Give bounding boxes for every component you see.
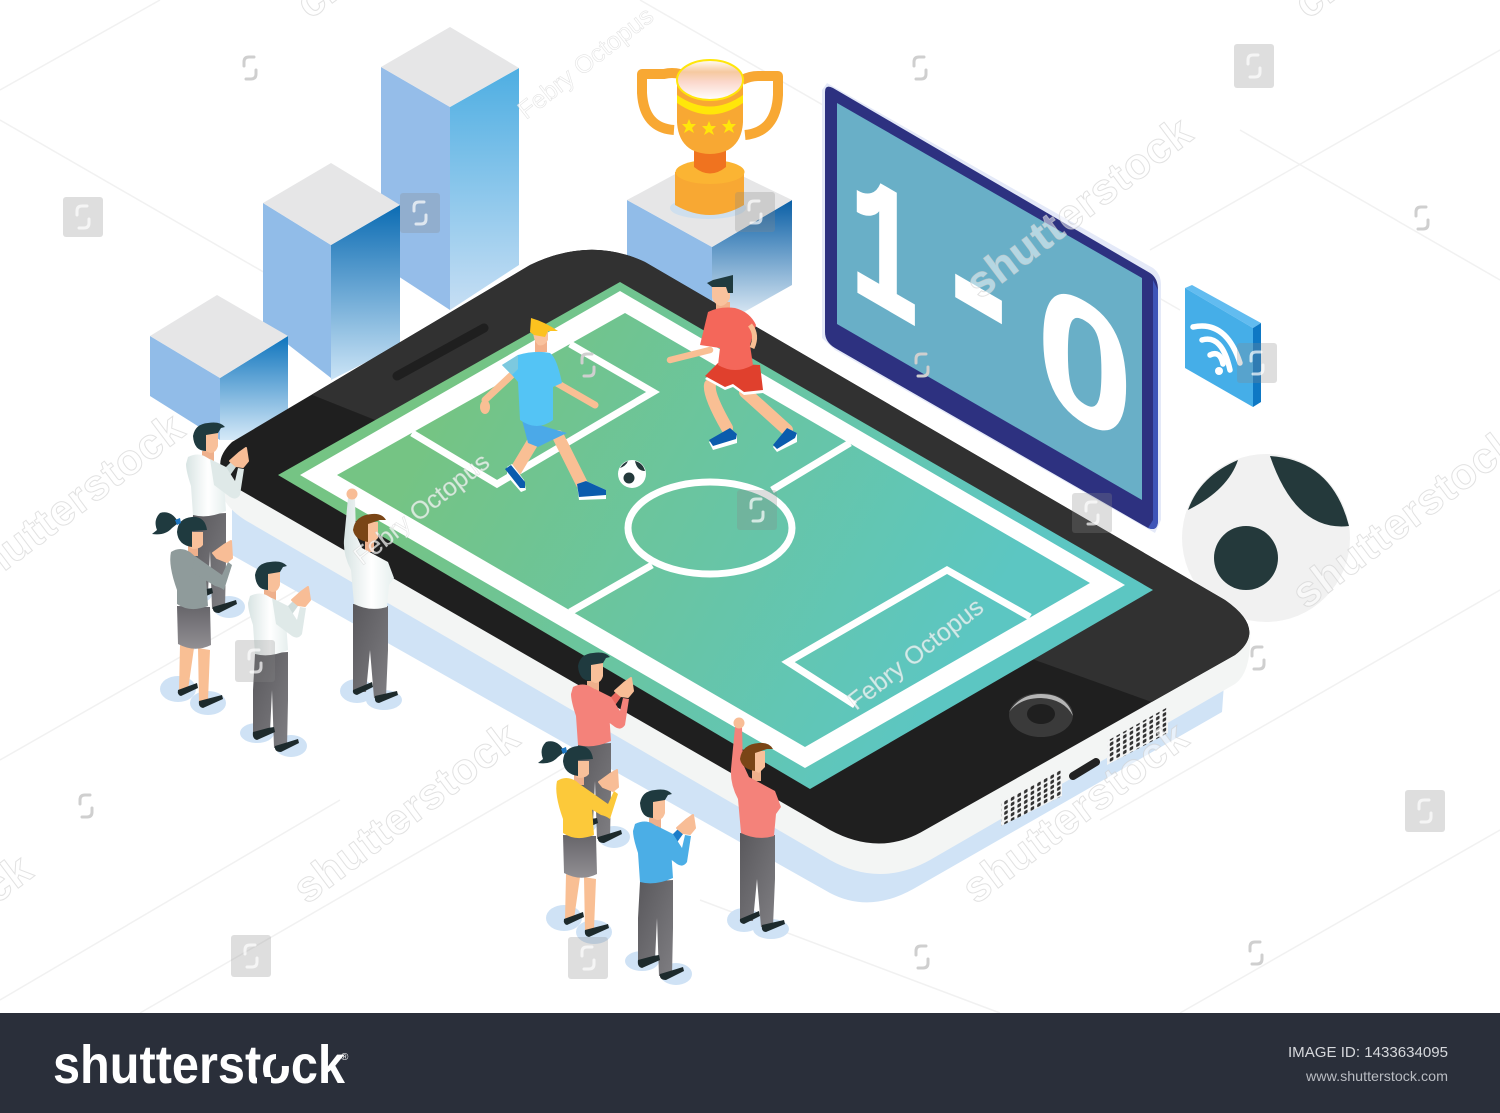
watermark logo tiles bbox=[63, 44, 1445, 979]
chart: medium bar bbox=[263, 163, 400, 380]
footer bar bbox=[0, 1013, 1500, 1113]
watermark texts: shutterstock bbox=[284, 712, 529, 913]
watermark texts: shutterstock bbox=[957, 107, 1202, 308]
score dash: - bbox=[950, 172, 1007, 397]
player: red kit bbox=[670, 275, 797, 452]
person: woman in grey jacket bbox=[152, 512, 232, 715]
small soccer ball bbox=[618, 460, 646, 488]
spectators right group bbox=[538, 652, 789, 985]
score digit zero: 0 bbox=[1037, 239, 1133, 486]
phone body sheen bbox=[312, 250, 1250, 702]
charging port bbox=[1073, 762, 1096, 776]
speaker slot bbox=[397, 328, 484, 376]
trophy stars bbox=[682, 119, 736, 135]
person: man in pink shirt bbox=[563, 652, 633, 848]
smartphone bbox=[220, 220, 1300, 902]
watermark texts: Febry Octopus bbox=[348, 448, 495, 571]
person: man in white shirt clapping bbox=[240, 562, 310, 757]
trophy pedestal bar bbox=[627, 158, 792, 330]
scoreboard bbox=[822, 83, 1161, 533]
home button bbox=[1009, 693, 1073, 737]
footer logo o gaps bbox=[257, 1054, 293, 1086]
phone side edge bbox=[222, 462, 1250, 874]
football pitch bbox=[278, 282, 1153, 789]
person: man in pink shirt cheering bbox=[727, 718, 789, 939]
person: man in white shirt back bbox=[178, 422, 248, 618]
large soccer ball bbox=[1182, 454, 1350, 622]
pitch outer lines bbox=[300, 291, 1125, 768]
penalty box bottom bbox=[788, 570, 1030, 705]
image id: IMAGE ID: 1433634095 bbox=[1288, 1044, 1448, 1061]
icon: trophy bbox=[642, 60, 778, 219]
centre circle bbox=[628, 482, 792, 574]
person: woman in yellow jacket bbox=[538, 741, 618, 944]
watermark texts: Febry Octopus bbox=[842, 593, 989, 716]
watermark texts: Febry Octopus bbox=[512, 2, 659, 125]
footer logo registered mark: ® bbox=[341, 1052, 349, 1063]
phone body bbox=[220, 250, 1249, 843]
phone ground shadow bbox=[232, 500, 1225, 902]
halfway line bbox=[570, 443, 850, 612]
chart: small bar bbox=[150, 295, 288, 440]
player: blue kit bbox=[480, 318, 606, 500]
score digit one: 1 bbox=[850, 135, 919, 382]
speaker grille left bbox=[1001, 769, 1062, 826]
person: man in blue shirt bbox=[625, 790, 695, 985]
speaker grille right bbox=[1107, 707, 1168, 765]
icon: wifi tile bbox=[1185, 285, 1261, 407]
site url: www.shutterstock.com bbox=[1305, 1068, 1448, 1084]
chart: tall bar bbox=[381, 27, 519, 310]
footer logo: shutterstock bbox=[53, 1035, 346, 1095]
person: man in white shirt cheering bbox=[340, 488, 402, 710]
penalty box top bbox=[412, 344, 653, 484]
spectators left group bbox=[152, 422, 402, 757]
watermark texts: shutterstock bbox=[953, 712, 1198, 913]
